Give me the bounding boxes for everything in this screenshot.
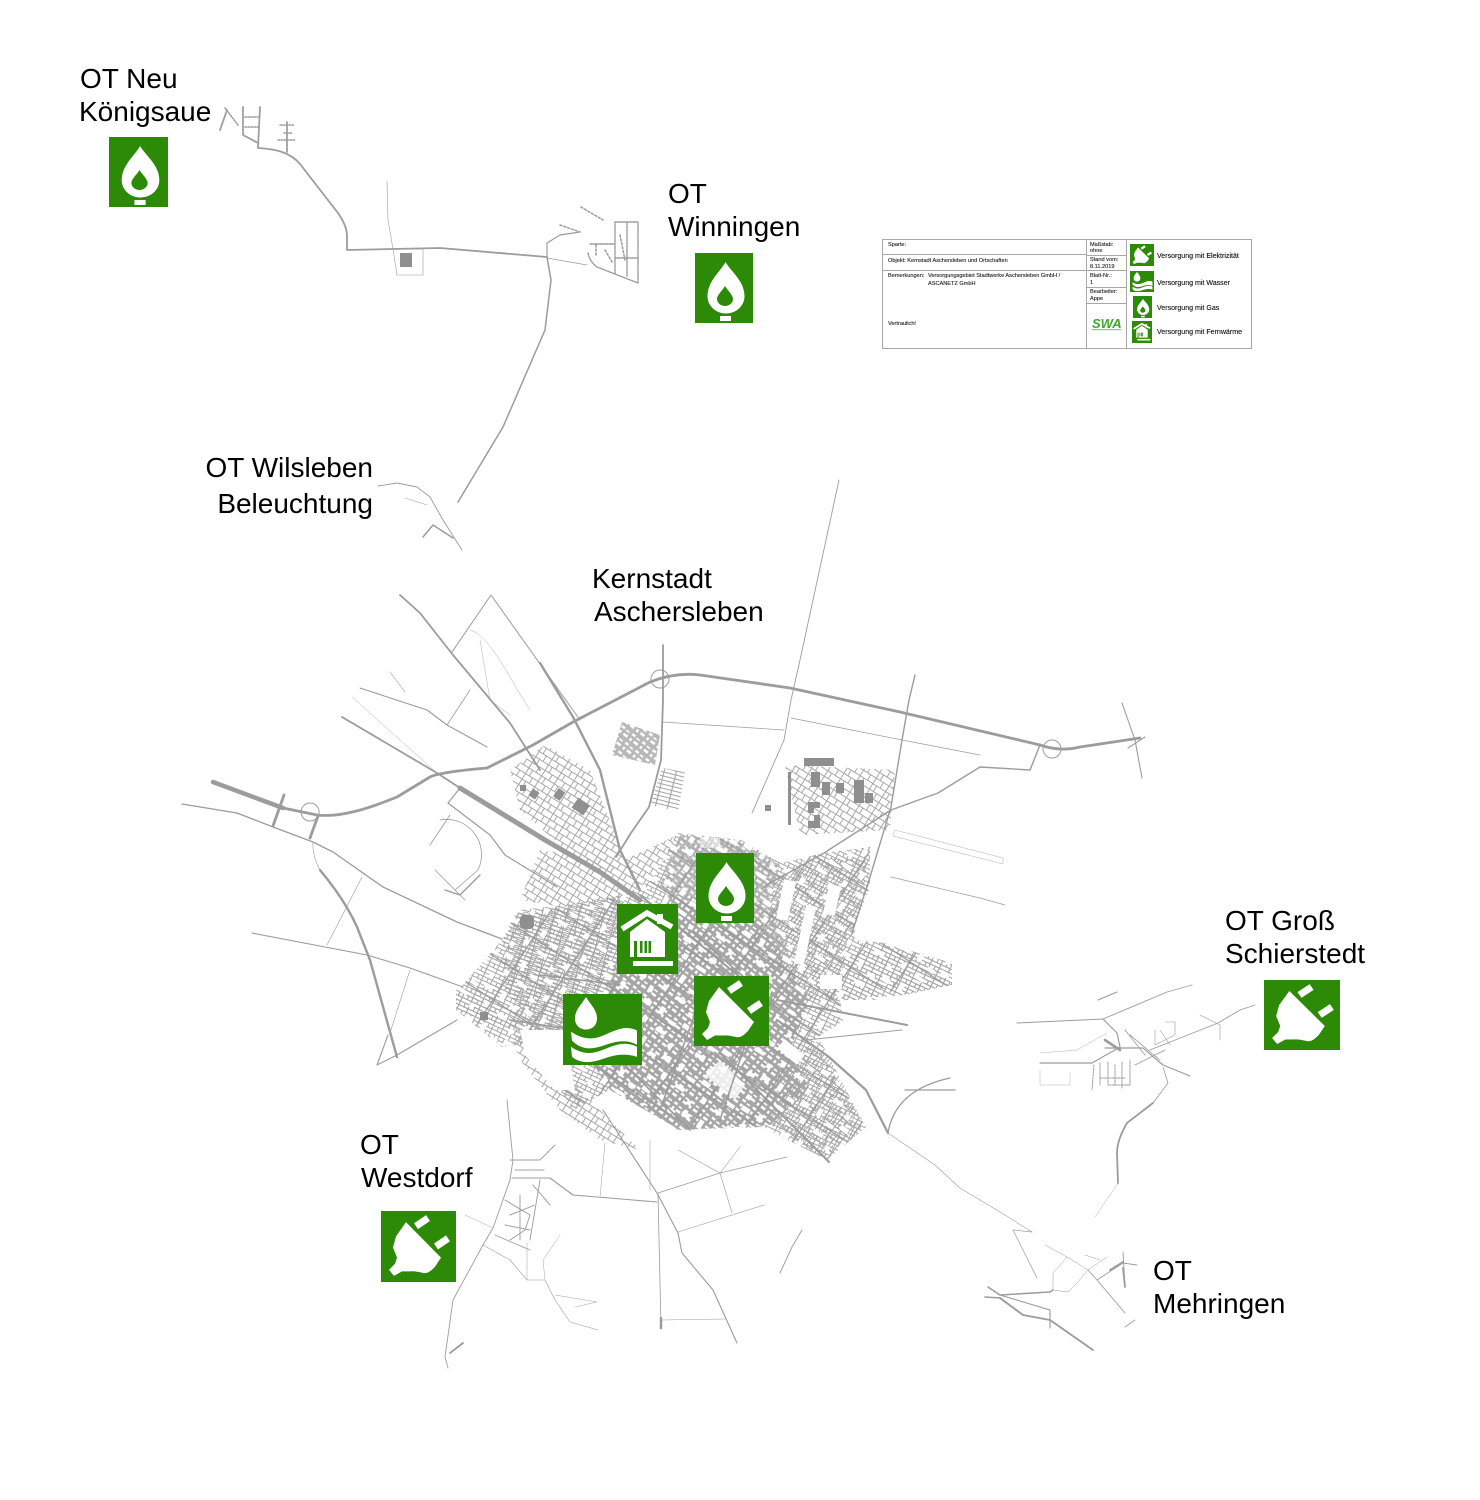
title block text: Sparte:	[888, 242, 906, 248]
map: district fill, far-east settlement	[838, 945, 950, 1000]
title block text: Appe	[1090, 296, 1103, 302]
legend: water	[1130, 271, 1231, 292]
map: district fill, northern blocks	[612, 722, 660, 765]
panel: title block and legend	[882, 240, 1252, 348]
label: OT Wilsleben Beleuchtung: OT Wilsleben	[205, 452, 373, 483]
map: open spaces within the town	[520, 838, 882, 1100]
logo: SWA: SWA	[1092, 316, 1122, 331]
title block text: ohne	[1090, 248, 1102, 254]
label: Kernstadt Aschersleben: Aschersleben	[594, 596, 764, 627]
label: OT Winningen: OT	[668, 178, 707, 209]
icon: district heating, Kernstadt	[617, 904, 678, 974]
map: district fill, block beside northern road	[650, 768, 685, 812]
legend: electricity: Versorgung mit Elektrizität	[1157, 253, 1239, 260]
icon: gas, Winningen	[695, 253, 753, 323]
map: industrial buildings	[480, 758, 873, 1020]
title block text: 1	[1090, 280, 1093, 286]
label: Kernstadt Aschersleben: Kernstadt	[592, 563, 712, 594]
icon: electricity, Groß Schierstedt	[1264, 980, 1340, 1050]
label: OT Winningen: Winningen	[668, 211, 800, 242]
map: Westdorf network	[445, 1100, 802, 1368]
label: OT Groß Schierstedt: Schierstedt	[1225, 938, 1365, 969]
map: road network	[182, 480, 1145, 1162]
label: OT Westdorf: Westdorf	[361, 1162, 473, 1193]
map: district fill, north-east industry	[785, 765, 895, 835]
title block text: Bemerkungen:	[888, 273, 925, 279]
map: district fill, west quarter	[503, 895, 640, 1040]
legend: electricity	[1130, 244, 1239, 266]
title block text: Stand vom:	[1090, 257, 1119, 263]
icon: gas, Kernstadt	[696, 853, 754, 923]
icon: gas, Neu Königsaue	[109, 137, 168, 207]
title block text: ASCANETZ GmbH	[928, 281, 976, 287]
map: district fill, east quarter	[770, 858, 868, 1000]
label: OT Mehringen: OT	[1153, 1255, 1192, 1286]
map: district fill, rail yard west	[520, 835, 677, 907]
map: district fill, industrial west	[510, 745, 625, 880]
map: irregular block overlay	[456, 833, 952, 1160]
title block text: Versorgungsgebiet Stadtwerke Aschersleben GmbH /	[928, 273, 1061, 279]
map: district fill, north quarter	[660, 835, 790, 970]
legend: gas: Versorgung mit Gas	[1157, 305, 1220, 312]
legend: district heating: Versorgung mit Fernwärme	[1157, 329, 1242, 336]
icon: electricity, Westdorf	[381, 1211, 456, 1282]
map: Mehringen network	[888, 1133, 1137, 1350]
title block text	[888, 242, 1119, 327]
map: Wilsleben network	[378, 483, 462, 550]
title block frame	[882, 240, 1252, 348]
legend: district heating	[1132, 321, 1242, 343]
title block text: Objekt: Kernstadt Aschersleben und Ortschaften	[888, 258, 1008, 264]
map: Neu Königsaue and Winningen network	[220, 107, 638, 550]
legend: gas	[1133, 296, 1220, 318]
title block text: Maßstab:	[1090, 242, 1114, 248]
map: river valley south-west	[505, 1000, 640, 1150]
label: OT Groß Schierstedt: OT Groß	[1225, 905, 1335, 936]
map: district fill, south-east quarter	[770, 1040, 862, 1160]
label: OT Wilsleben Beleuchtung: Beleuchtung	[217, 488, 373, 519]
label: OT Neu Königsaue: OT Neu	[80, 63, 178, 94]
label: OT Westdorf: OT	[360, 1129, 399, 1160]
icon: water, Kernstadt	[563, 994, 642, 1065]
label: OT Neu Königsaue: Königsaue	[79, 96, 211, 127]
map: district fill, outer town	[456, 833, 952, 1160]
label: OT Mehringen: Mehringen	[1153, 1288, 1285, 1319]
map: Groß Schierstedt network	[1017, 985, 1255, 1217]
map: district fill, western village	[456, 985, 505, 1025]
map: Kernstadt Aschersleben	[182, 480, 1145, 1162]
map: district fill, inner city	[590, 900, 810, 1130]
title block text: Vertraulich!	[888, 321, 916, 327]
title block text: Bearbeiter:	[1090, 289, 1118, 295]
title block text: Blatt-Nr.:	[1090, 273, 1112, 279]
legend: water: Versorgung mit Wasser	[1157, 280, 1231, 287]
title block text: 8.11.2019	[1090, 264, 1114, 270]
icon: electricity, Kernstadt	[694, 976, 769, 1046]
